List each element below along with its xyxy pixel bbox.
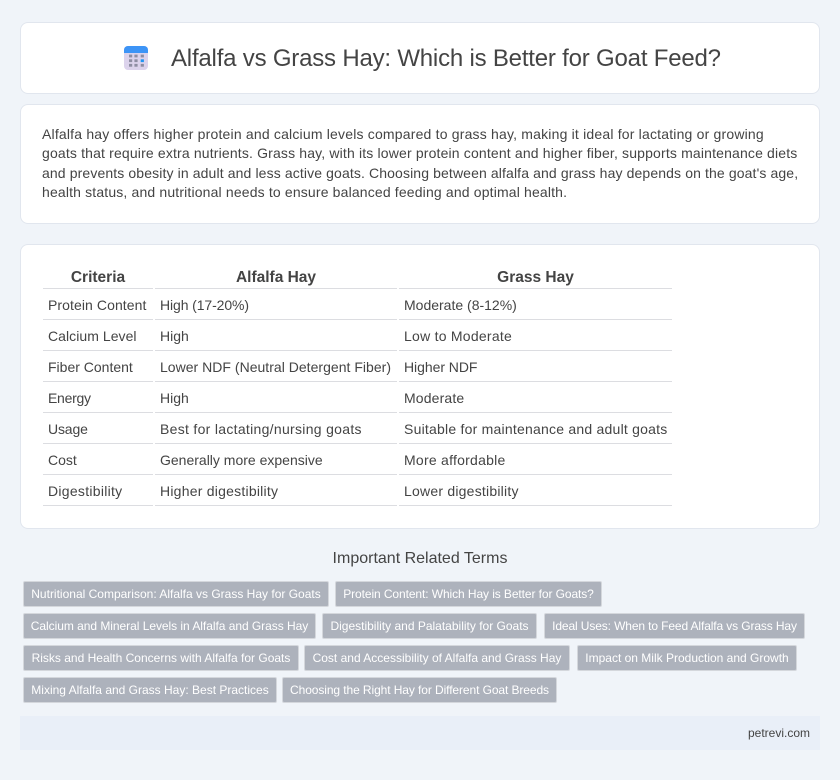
tag (577, 645, 797, 671)
text: More affordable (404, 452, 506, 468)
tag: Digestibility and Palatability for Goats (330, 619, 529, 633)
row: protein content (43, 289, 153, 320)
header panel (20, 22, 820, 94)
text: Lower NDF (Neutral Detergent Fiber) (160, 359, 391, 375)
tag: Impact on Milk Production and Growth (585, 651, 789, 665)
tag: Mixing Alfalfa and Grass Hay: Best Practices (31, 683, 269, 697)
tag: Risks and Health Concerns with Alfalfa for Goats (32, 651, 290, 665)
text: Suitable for maintenance and adult goats (404, 421, 668, 437)
text: Higher NDF (404, 359, 477, 375)
intro text (42, 126, 798, 200)
header: grass hay: Grass Hay (497, 269, 574, 286)
row: usage: Usage (48, 421, 88, 437)
text: Moderate (8-12%) (404, 297, 517, 313)
tag: Calcium and Mineral Levels in Alfalfa and Grass Hay (31, 619, 308, 633)
tag: Choosing the Right Hay for Different Goat Breeds (290, 683, 549, 697)
row: digestibility (43, 475, 153, 506)
header: alfalfa hay: Alfalfa Hay (236, 269, 316, 286)
tag (544, 613, 805, 639)
row: energy: Energy (48, 390, 91, 406)
row: digestibility: Digestibility (48, 483, 122, 499)
header: criteria: Criteria (71, 269, 125, 286)
tag (335, 581, 602, 607)
text: Best for lactating/nursing goats (160, 421, 362, 437)
tag: Cost and Accessibility of Alfalfa and Grass Hay (313, 651, 561, 665)
tag (322, 613, 537, 639)
row: cost: Cost (48, 452, 77, 468)
header: alfalfa hay (155, 267, 397, 289)
row: protein content: Protein Content (48, 297, 146, 313)
tag: Protein Content: Which Hay is Better for Goats? (343, 587, 594, 601)
row: fiber content: Fiber Content (48, 359, 133, 375)
text: Generally more expensive (160, 452, 323, 468)
intro text: health status, and nutritional needs to ensure balanced feeding and optimal health. (42, 184, 567, 200)
tag group (23, 581, 805, 703)
row: calcium level (43, 320, 153, 351)
tag: Ideal Uses: When to Feed Alfalfa vs Grass Hay (552, 619, 797, 633)
intro text: goats that require extra nutrients. Grass hay, with its lower protein content and higher fiber, supports maintenance diets (42, 145, 797, 161)
text: Low to Moderate (404, 328, 512, 344)
row: usage (43, 413, 153, 444)
text: High (17-20%) (160, 297, 249, 313)
row: cost (43, 444, 153, 475)
intro text: Alfalfa hay offers higher protein and calcium levels compared to grass hay, making it ideal for lactating or growing (42, 126, 764, 142)
title: Alfalfa vs Grass Hay: Which is Better for Goat Feed? (171, 45, 721, 72)
tag (23, 581, 329, 607)
intro panel (20, 104, 820, 224)
panel: comparison table (20, 244, 820, 529)
tag: Nutritional Comparison: Alfalfa vs Grass Hay for Goats (31, 587, 321, 601)
heading: related terms: Important Related Terms (333, 550, 507, 567)
header: grass hay (399, 267, 672, 289)
footer bar (20, 716, 820, 750)
tag (23, 677, 277, 703)
row: fiber content (43, 351, 153, 382)
icon: calendar (124, 46, 148, 70)
text: Lower digestibility (404, 483, 519, 499)
text: High (160, 328, 189, 344)
tag (23, 613, 316, 639)
text: Higher digestibility (160, 483, 278, 499)
tag (282, 677, 557, 703)
text: Moderate (404, 390, 464, 406)
intro text: and prevents obesity in adult and less active goats. Choosing between alfalfa and grass hay depends on the goat's age, (42, 164, 798, 180)
row: energy (43, 382, 153, 413)
footer text: petrevi.com: petrevi.com (748, 726, 810, 740)
text: High (160, 390, 189, 406)
tag (304, 645, 570, 671)
header: criteria (43, 267, 153, 289)
row: calcium level: Calcium Level (48, 328, 137, 344)
tag (23, 645, 299, 671)
